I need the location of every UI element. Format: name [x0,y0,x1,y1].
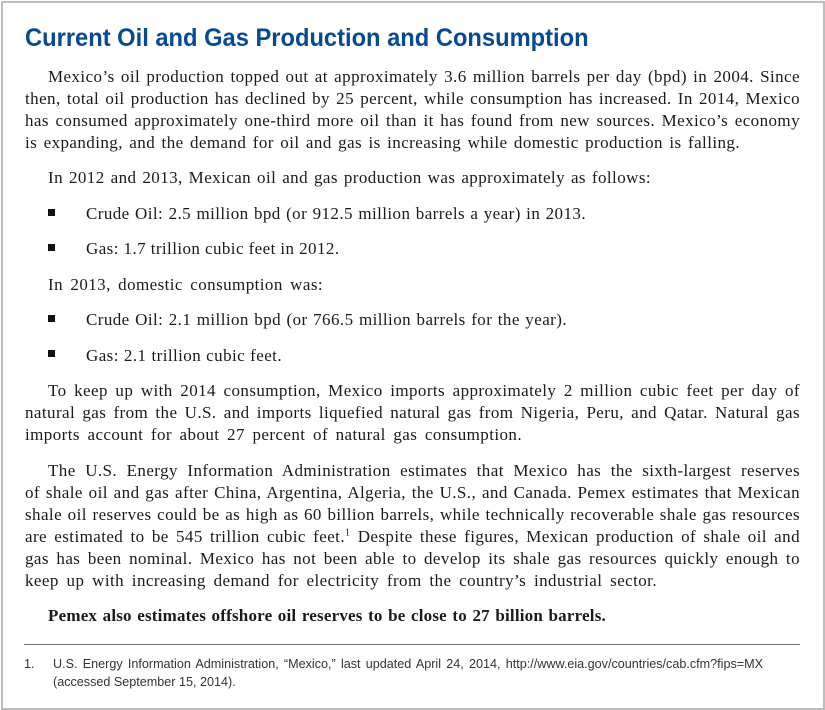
paragraph: shale reserves: shale oil reserves could be as high as 60 billion barrels, while technically recoverable shale gas resources [25,505,800,524]
paragraph: shale reserves: of shale oil and gas after China, Argentina, Algeria, the U.S., and Canada. Pemex estimates that Mexican [25,483,800,502]
list: consumption figures: Crude Oil: 2.1 million bpd (or 766.5 million barrels for the year). [86,310,567,329]
paragraph: production overview: is expanding, and the demand for oil and gas is increasing while domestic production is falling. [25,133,740,152]
footnote: (accessed September 15, 2014). [53,675,236,689]
paragraph: production overview: Mexico’s oil production topped out at approximately 3.6 million barrels per day (bpd) in 2004. Since [48,67,800,86]
paragraph: shale reserves: keep up with increasing demand for electricity from the country’s industrial sector. [25,571,657,590]
list: consumption figures: Gas: 2.1 trillion cubic feet. [86,346,282,365]
paragraph: imports: To keep up with 2014 consumption, Mexico imports approximately 2 million cubic feet per day of [48,381,800,400]
footnote [24,657,763,689]
text: production intro: In 2012 and 2013, Mexican oil and gas production was approximately as follows: [48,168,651,187]
paragraph: production overview: has consumed approximately one-third more oil than it has found from new sources. Mexico’s economy [25,111,800,130]
paragraph: production overview: then, total oil production has declined by 25 percent, while consumption has increased. In 2014, Mexico [25,89,800,108]
title: Current Oil and Gas Production and Consumption [25,24,589,52]
paragraph: imports: imports account for about 27 percent of natural gas consumption. [25,425,522,444]
list: production figures: Gas: 1.7 trillion cubic feet in 2012. [86,239,340,258]
paragraph: shale reserves: gas has been nominal. Mexico has not been able to develop its shale gas resources quickly enough to [25,549,800,568]
list: production figures [48,204,586,258]
paragraph: shale reserves [25,461,800,590]
footnote: U.S. Energy Information Administration, “Mexico,” last updated April 24, 2014, http://www.eia.gov/countries/cab.cfm?fips=MX [53,657,763,671]
paragraph: production overview [25,67,800,152]
list: consumption figures [48,310,567,365]
footnote: 1. [24,657,35,671]
paragraph: imports [25,381,800,444]
paragraph: shale reserves: The U.S. Energy Information Administration estimates that Mexico has the sixth-largest reserves [48,461,800,480]
paragraph: imports: natural gas from the U.S. and imports liquefied natural gas from Nigeria, Peru, and Qatar. Natural gas [25,403,800,422]
text: consumption intro: In 2013, domestic consumption was: [48,275,323,294]
paragraph: shale reserves: are estimated to be 545 trillion cubic feet.1 Despite these figures, Mexican production of shale oil and [25,527,800,546]
list: production figures: Crude Oil: 2.5 million bpd (or 912.5 million barrels a year) in 2013. [86,204,586,223]
callout: offshore reserves: Pemex also estimates offshore oil reserves to be close to 27 billion barrels. [48,606,606,625]
